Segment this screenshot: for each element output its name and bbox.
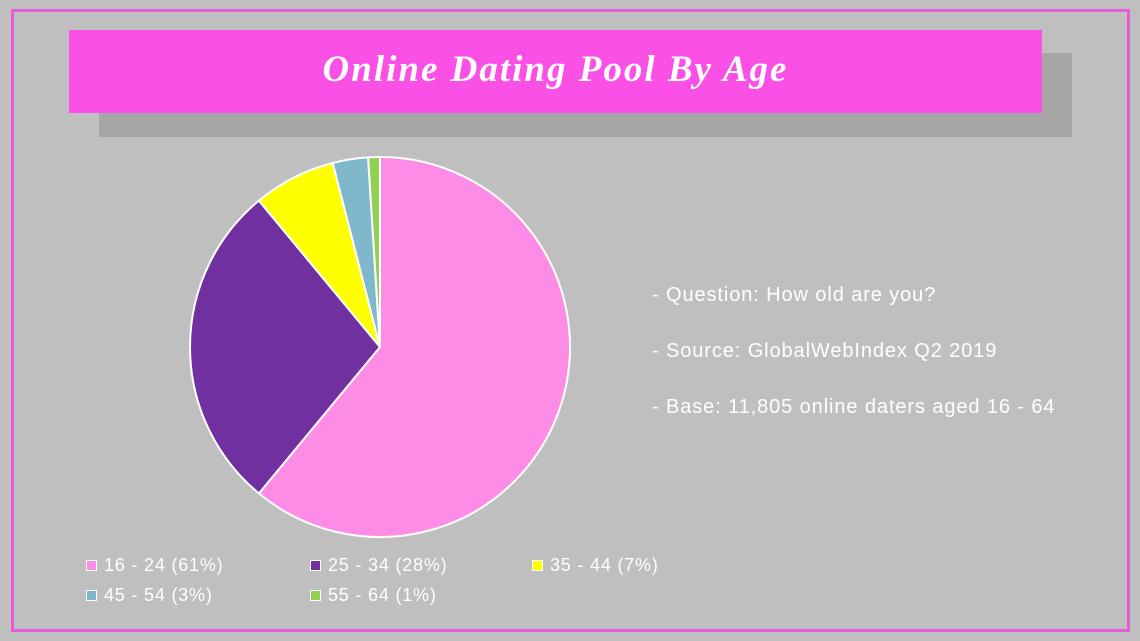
legend <box>86 555 659 605</box>
title banner: Online Dating Pool By Age <box>323 49 788 90</box>
legend: 25 - 34 (28%) <box>328 555 447 575</box>
legend: 16 - 24 (61%) <box>104 555 223 575</box>
notes text <box>652 284 1055 418</box>
notes text: - Source: GlobalWebIndex Q2 2019 <box>652 340 997 362</box>
legend: 35 - 44 (7%) <box>550 555 659 575</box>
notes text: - Base: 11,805 online daters aged 16 - 64 <box>652 396 1055 418</box>
legend: 45 - 54 (3%) <box>104 585 213 605</box>
title shadow <box>99 53 1072 137</box>
legend: 55 - 64 (1%) <box>328 585 437 605</box>
title banner <box>69 30 1042 113</box>
notes text: - Question: How old are you? <box>652 284 936 306</box>
